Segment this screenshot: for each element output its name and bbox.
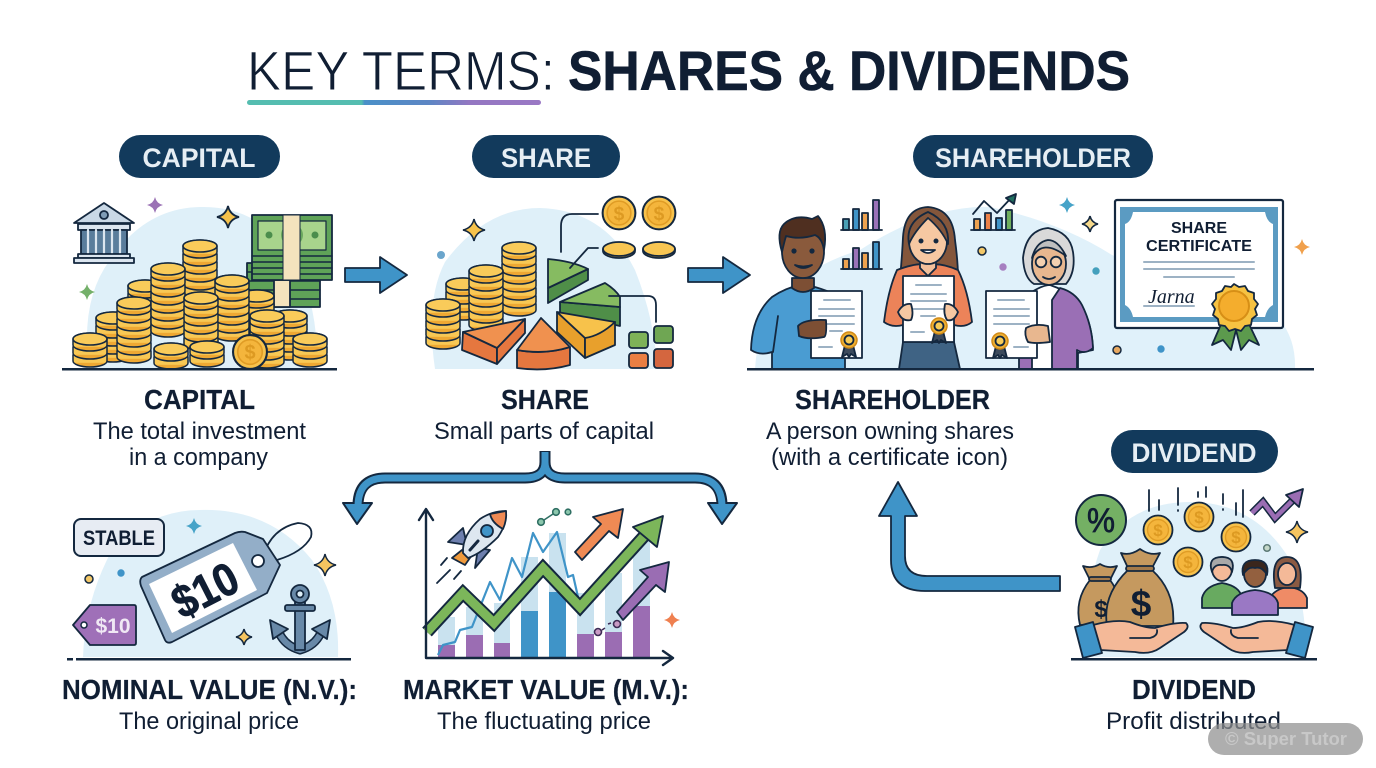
ground line	[1071, 658, 1317, 660]
arrow: share to shareholder	[688, 257, 750, 293]
icon: percent badge: %	[1087, 502, 1115, 540]
text: dividend: Profit distributed	[1106, 708, 1281, 735]
bars	[438, 533, 650, 658]
text: shareholder: (with a certificate icon)	[771, 444, 1008, 471]
coin stacks	[426, 242, 536, 349]
text: market value: MARKET VALUE (M.V.):	[403, 674, 689, 705]
icon: big price tag	[140, 523, 311, 643]
icon: banknotes	[247, 215, 332, 307]
decorative sparkles and dots	[978, 197, 1310, 354]
orange sparkle	[664, 612, 680, 628]
skirt	[899, 342, 960, 369]
pill: shareholder: SHAREHOLDER	[935, 143, 1131, 173]
illustration: nominal value	[67, 510, 351, 660]
icon: money bags: $	[1094, 596, 1108, 623]
title	[247, 39, 1130, 105]
icon: big price tag: $10	[163, 551, 247, 629]
falling lines	[1149, 487, 1243, 517]
sparkles and dots	[85, 518, 336, 645]
text: nominal value: The original price	[119, 708, 299, 735]
trend dots	[538, 509, 571, 525]
document	[903, 276, 954, 343]
ground line	[67, 658, 351, 660]
pill: capital	[119, 135, 280, 178]
icon: purple tag: $10	[95, 615, 131, 638]
pill: dividend	[1111, 430, 1278, 473]
person: older woman in purple	[986, 228, 1093, 369]
certificate heading line two: CERTIFICATE	[1146, 238, 1252, 255]
pill: dividend: DIVIDEND	[1132, 438, 1256, 468]
icon: sparkle and dot	[437, 219, 485, 259]
icon: money bags	[1078, 549, 1173, 626]
text: capital: The total investment	[93, 418, 306, 445]
text: dividend	[1106, 674, 1281, 735]
seal and ribbon	[1212, 284, 1259, 350]
falling coins	[1144, 502, 1250, 576]
text: share	[434, 384, 654, 445]
green zigzag arrow	[427, 516, 663, 632]
text: shareholder: A person owning shares	[766, 418, 1014, 445]
icon: bank	[74, 203, 134, 263]
ground line	[62, 368, 337, 370]
mini bar charts	[841, 194, 1016, 269]
background blob	[1086, 502, 1305, 657]
icon: money bags: $	[1131, 583, 1152, 624]
certificate lines	[1144, 262, 1254, 306]
text: capital: in a company	[129, 444, 268, 471]
stable badge	[74, 519, 164, 556]
pie wedges	[462, 259, 620, 369]
title bold part: SHARES & DIVIDENDS	[568, 39, 1130, 102]
purple trend arrow	[1252, 489, 1303, 518]
text: shareholder	[766, 384, 1014, 471]
text: nominal value	[62, 674, 357, 735]
background blob	[432, 208, 657, 369]
purple dots	[594, 620, 620, 636]
sparkle and dot	[1264, 521, 1308, 551]
person: man in blue	[751, 216, 862, 369]
background blob	[87, 207, 317, 369]
illustration: market value	[419, 509, 680, 665]
icon: sparkles	[79, 197, 239, 300]
icon: percent badge	[1076, 495, 1126, 545]
certificate heading: SHARE	[1171, 220, 1227, 237]
pill: share	[472, 135, 620, 178]
title light part: KEY TERMS:	[247, 39, 555, 102]
connector lines	[561, 214, 656, 322]
share certificate	[747, 200, 1314, 370]
illustration: dividend	[1071, 487, 1317, 660]
left hand	[1075, 621, 1188, 658]
pill: share: SHARE	[501, 143, 591, 173]
people group	[1202, 557, 1307, 615]
illustration: shareholder	[62, 194, 1363, 755]
person: woman in orange	[884, 207, 972, 369]
pill: capital: CAPITAL	[142, 143, 256, 173]
signature: Jarna	[1148, 286, 1195, 308]
text: nominal value: NOMINAL VALUE (N.V.):	[62, 674, 357, 705]
ground line	[747, 368, 1314, 370]
icon: dollar coin	[233, 335, 267, 369]
icon: rocket	[437, 511, 506, 583]
text: share: SHARE	[501, 384, 589, 415]
background blob	[83, 510, 338, 657]
text: capital: CAPITAL	[144, 384, 255, 415]
purple arrow	[617, 562, 669, 620]
orange arrow	[575, 509, 623, 560]
text: shareholder: SHAREHOLDER	[795, 384, 990, 415]
text: market value	[403, 674, 689, 735]
text: share: Small parts of capital	[434, 418, 654, 445]
small squares	[629, 326, 673, 368]
icon: anchor	[270, 585, 330, 650]
pill: shareholder	[913, 135, 1153, 178]
text: dividend: DIVIDEND	[1132, 674, 1256, 705]
arrow: brace from share to values	[343, 451, 737, 524]
blue price line	[438, 532, 578, 655]
axes	[419, 509, 673, 665]
document	[811, 291, 862, 358]
text: market value: The fluctuating price	[437, 708, 651, 735]
arrow: dividend to shareholder	[879, 482, 1060, 591]
background blob	[755, 207, 1295, 369]
text: capital	[93, 384, 306, 471]
coins	[603, 197, 675, 258]
coin stacks	[73, 240, 327, 369]
stable badge: STABLE	[83, 527, 155, 550]
illustration: capital	[62, 197, 337, 370]
right hand	[1200, 621, 1313, 658]
watermark	[1208, 723, 1363, 755]
title underline	[247, 100, 541, 105]
arrow: capital to share	[345, 257, 407, 293]
icon: purple tag	[73, 605, 136, 645]
illustration: share	[426, 197, 675, 369]
watermark: © Super Tutor	[1225, 729, 1347, 749]
document	[986, 291, 1037, 358]
